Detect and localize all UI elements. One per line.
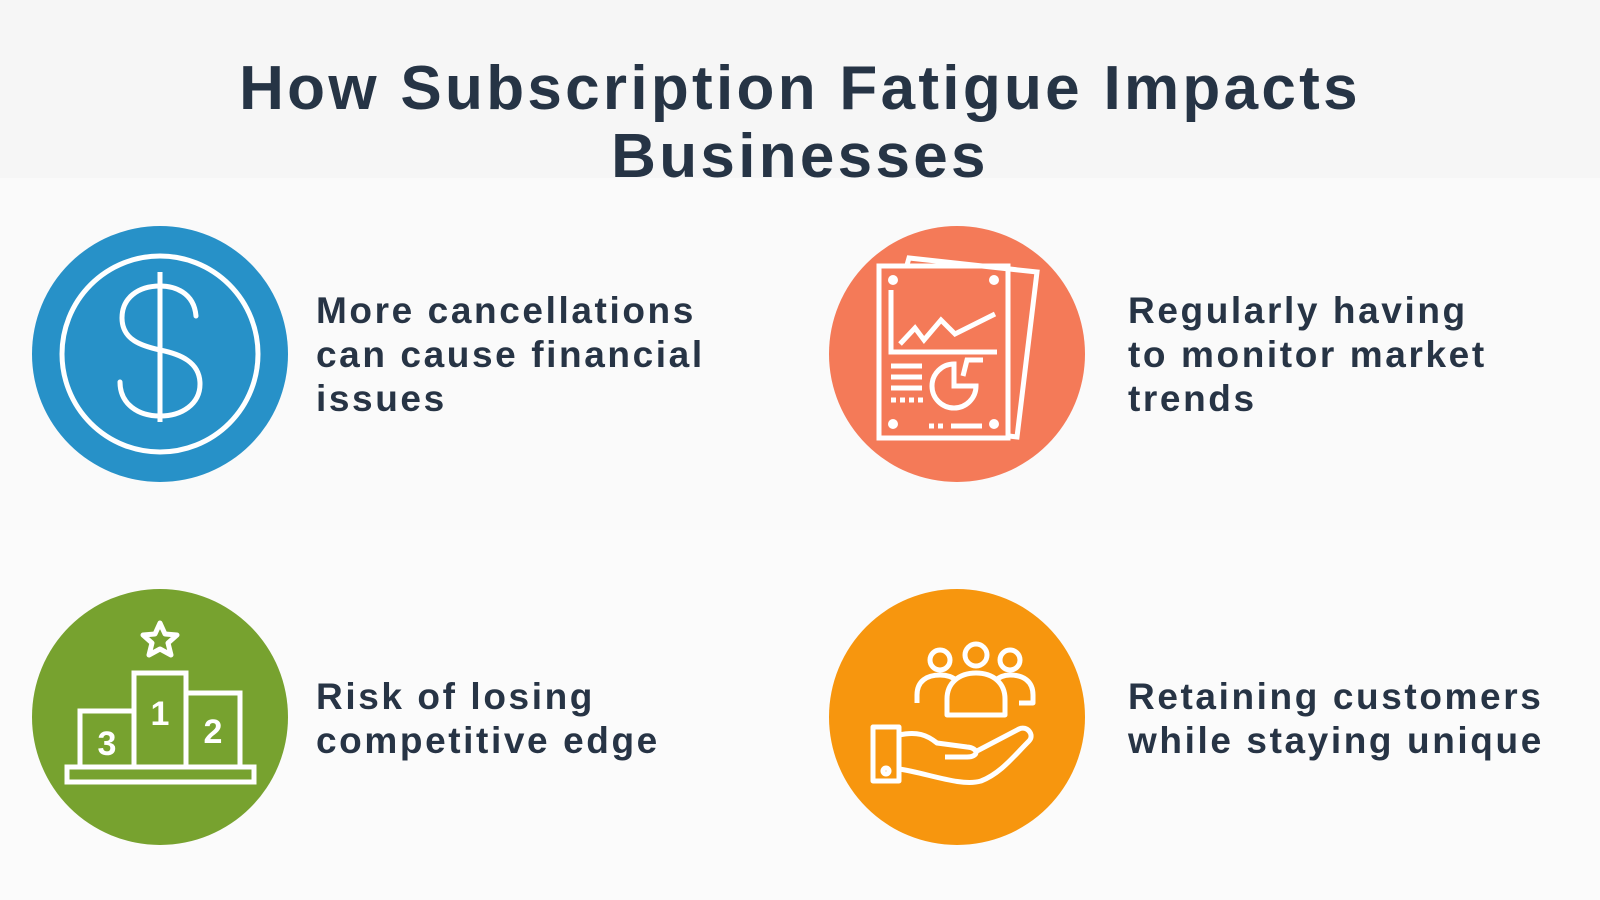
panel: market trends — [829, 226, 1487, 482]
text: competitive edge — [316, 676, 660, 761]
text: retaining customers: while staying unique — [1128, 720, 1544, 761]
title — [239, 54, 1361, 191]
icon: hand with people — [829, 589, 1085, 845]
text: financial issues: can cause financial — [316, 334, 705, 375]
panel: retaining customers — [829, 589, 1544, 845]
panel: financial issues — [32, 226, 705, 482]
title: Businesses — [611, 122, 989, 191]
text: retaining customers — [1128, 676, 1544, 761]
text: financial issues — [316, 290, 705, 419]
text: retaining customers: Retaining customers — [1128, 676, 1543, 717]
panel: competitive edge — [32, 589, 660, 845]
title: How Subscription Fatigue Impacts — [239, 54, 1361, 123]
icon: podium: 1 — [151, 695, 169, 733]
text: market trends: Regularly having — [1128, 290, 1468, 331]
text: market trends: to monitor market — [1128, 334, 1487, 375]
text: competitive edge: competitive edge — [316, 720, 660, 761]
text: market trends — [1128, 290, 1487, 419]
text: competitive edge: Risk of losing — [316, 676, 595, 717]
icon: podium: 3 — [98, 725, 116, 763]
text: market trends: trends — [1128, 378, 1257, 419]
icon: report pages — [829, 226, 1085, 482]
text: financial issues: issues — [316, 378, 447, 419]
icon: dollar coin — [32, 226, 288, 482]
text: financial issues: More cancellations — [316, 290, 696, 331]
icon: podium: 2 — [204, 713, 222, 751]
icon: podium — [32, 589, 288, 845]
